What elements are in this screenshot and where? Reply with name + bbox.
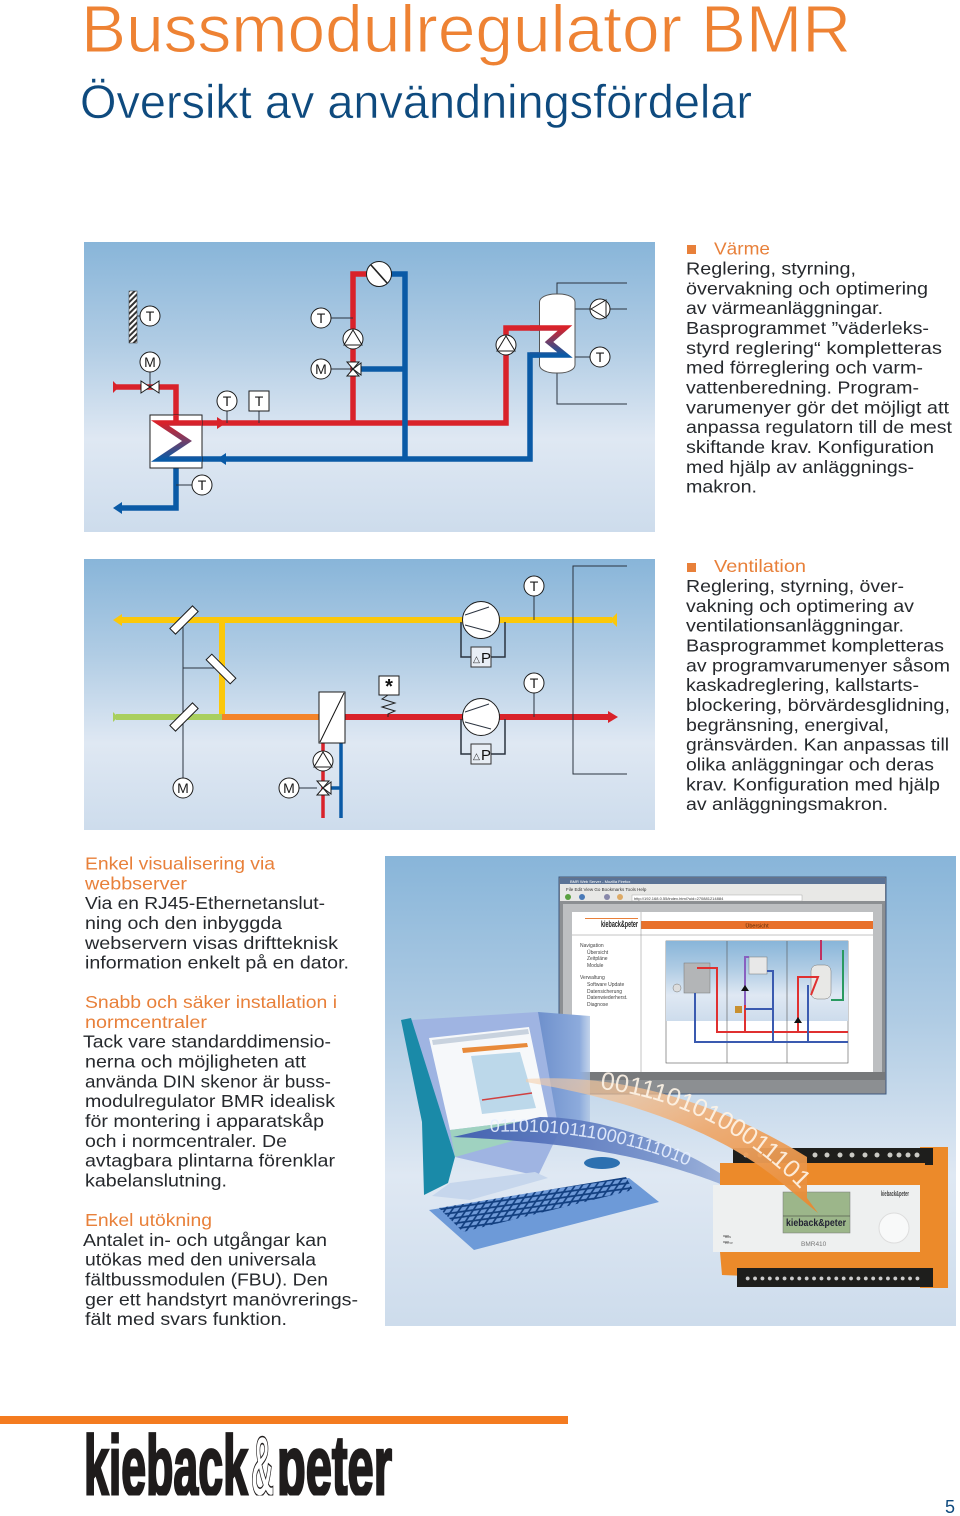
blue pipes — [118, 274, 560, 508]
text block: Enkel utökning — [83, 1210, 358, 1329]
icon: hot water tank — [496, 283, 627, 404]
text block: Ventilation: begränsning, energival, — [686, 715, 889, 735]
icon: hot water tank: T — [596, 349, 605, 365]
orange data ribbon — [526, 1072, 818, 1213]
panel: ventilation diagram — [84, 559, 655, 830]
icon: exhaust fan with pressure switch — [461, 602, 505, 667]
blue data ribbon — [453, 1117, 720, 1184]
text block: Enkel utökning: Enkel utökning — [85, 1210, 212, 1230]
browser window: Navigation — [580, 943, 604, 949]
text block: Snabb och säker installation: Snabb och säker installation i — [85, 992, 337, 1012]
orange data ribbon: 00111010100011101 — [602, 1072, 809, 1188]
keyboard — [429, 1177, 659, 1250]
text block: Enkel visualisering via webbserver: Enkel visualisering via — [85, 854, 275, 874]
icon: frost guard — [379, 676, 399, 717]
icon: T sensors on main — [176, 391, 269, 495]
icon: supply fan with pressure switch: P — [481, 747, 491, 764]
icon: T sensors: T — [530, 578, 539, 594]
text block: Enkel utökning: ger ett handstyrt manövrerings- — [85, 1289, 358, 1309]
red pipes — [113, 274, 560, 423]
browser window: Zeitpläne — [587, 956, 608, 962]
text block: Värme: Basprogrammet ”väderleks- — [686, 318, 929, 338]
icon: motor valve: M — [144, 354, 156, 370]
text block: Snabb och säker installation: modulregulator BMR idealisk — [85, 1091, 335, 1111]
text block: Snabb och säker installation: för montering i apparatskåp — [85, 1111, 324, 1131]
text block: Värme: styrd reglering“ kompletteras — [686, 338, 942, 358]
icon: outdoor wall sensor — [129, 291, 160, 343]
text block: Snabb och säker installation — [83, 992, 337, 1190]
browser window: Verwaltung — [580, 975, 605, 981]
text block: Ventilation: gränsvärden. Kan anpassas till — [686, 735, 949, 755]
mouse — [584, 1157, 620, 1169]
text block: Ventilation: Ventilation — [714, 556, 806, 576]
icon: T sensors: T — [530, 675, 539, 691]
icon: frost guard: * — [385, 676, 393, 698]
text block: Snabb och säker installation: och i normcentraler. De — [85, 1131, 287, 1151]
text block: Snabb och säker installation: nerna och möjligheten att — [85, 1052, 306, 1072]
text block: Enkel visualisering via webbserver: webbserver — [84, 873, 187, 893]
text block: Värme: övervakning och optimering — [686, 278, 928, 298]
icon: duct arrow heads — [113, 613, 618, 723]
panel: heating diagram — [84, 242, 655, 532]
browser window — [559, 877, 886, 1094]
text block: Ventilation: Basprogrammet kompletteras — [686, 636, 944, 656]
text block: Värme: anpassa regulatorn till de mest — [686, 417, 952, 437]
text block: Ventilation: olika anläggningar och deras — [686, 754, 934, 774]
icon: T sensors on main: T — [223, 393, 232, 409]
text block: Snabb och säker installation: normcentraler — [85, 1012, 207, 1032]
text block: Värme: varumenyer gör det möjligt att — [686, 397, 949, 417]
logo: kieback&peter: peter — [277, 1419, 392, 1513]
text block: Enkel visualisering via webbserver: ning och den inbyggda — [85, 913, 282, 933]
text block: Enkel utökning: utökas med den universala — [85, 1250, 316, 1270]
text block: Enkel visualisering via webbserver — [84, 854, 349, 973]
icon: inlet and outlet arrow heads — [113, 381, 226, 514]
text block: Enkel visualisering via webbserver: webservern visas driftteknisk — [84, 933, 338, 953]
icon: radiator circuit controls — [311, 262, 392, 379]
browser window: Module — [587, 963, 604, 969]
browser window: Datensicherung — [587, 989, 622, 995]
browser window: Software Update — [587, 982, 624, 988]
browser window: http://192.168.0.55/index.html?uid=270881214884 — [634, 896, 724, 901]
browser window: BMR Web Server - Mozilla Firefox — [570, 879, 630, 884]
text block: Värme: med hjälp av anläggnings- — [686, 457, 914, 477]
browser window: Übersicht — [745, 922, 769, 930]
panel: system illustration — [385, 856, 956, 1326]
text block: Värme: av värmeanläggningar. — [686, 298, 883, 318]
icon: dampers and motor — [170, 606, 236, 798]
text block: Ventilation: av programvarumenyer såsom — [686, 655, 950, 675]
BMR410 controller: BMR410 — [801, 1241, 827, 1248]
text block: Enkel utökning: fältbussmodulen (FBU). Den — [85, 1270, 328, 1290]
text block: Snabb och säker installation: avtagbara plintarna förenklar — [85, 1151, 335, 1171]
text block: Snabb och säker installation: Tack vare standarddimensio- — [83, 1032, 331, 1052]
computer tower — [538, 1012, 590, 1130]
logo: kieback&peter: & — [251, 1419, 274, 1513]
browser window: Übersicht — [587, 949, 609, 956]
icon: exhaust fan with pressure switch: △ — [473, 654, 480, 664]
text block: Enkel utökning: Antalet in- och utgångar kan — [83, 1230, 327, 1250]
icon: heating coil and water circuit — [279, 692, 345, 818]
text block: Snabb och säker installation: använda DIN skenor är buss- — [85, 1071, 331, 1091]
supply air duct — [116, 714, 610, 720]
BMR410 controller: Bus — [725, 1235, 731, 1239]
browser window: Diagnose — [587, 1002, 608, 1008]
text block: Ventilation: av anläggningsmakron. — [686, 794, 888, 814]
orange footer bar — [0, 1416, 568, 1424]
yellow ducts — [118, 620, 612, 717]
logo: kieback&peter — [86, 1432, 392, 1496]
icon: motor valve — [140, 352, 160, 393]
BMR410 controller: kieback&peter — [786, 1218, 846, 1229]
text block: Enkel visualisering via webbserver: information enkelt på en dator. — [85, 953, 349, 973]
icon: radiator circuit controls: T — [317, 310, 326, 326]
blue data ribbon: 011010101110001111010 — [490, 1119, 690, 1164]
subtitle: Översikt av användningsfördelar — [80, 75, 752, 128]
BMR410 controller: ●●●●●●●●●●●●●●●●●●●●●●●● — [745, 1273, 920, 1283]
icon: supply fan with pressure switch: △ — [473, 751, 480, 761]
text block: Ventilation: kaskadreglering, kallstarts- — [686, 675, 919, 695]
BMR410 controller: Error — [725, 1241, 734, 1245]
icon: exhaust fan with pressure switch: P — [481, 650, 491, 667]
text block: Enkel visualisering via webbserver: Via en RJ45-Ethernetanslut- — [85, 893, 325, 913]
text block: Värme: Reglering, styrning, — [686, 258, 856, 278]
text block: Ventilation: Reglering, styrning, över- — [686, 576, 904, 596]
browser plant schematic — [666, 940, 848, 1063]
text block: Värme: med förreglering och varm- — [686, 358, 923, 378]
icon: T sensors — [524, 576, 544, 717]
icon: outdoor wall sensor: T — [146, 308, 155, 324]
text block: Ventilation: ventilationsanläggningar. — [686, 616, 904, 636]
logo: kieback&peter: kieback — [84, 1419, 248, 1513]
browser window: File Edit View Go Bookmarks Tools Help — [566, 887, 647, 892]
text block: Värme: makron. — [686, 477, 757, 497]
text block: Ventilation: vakning och optimering av — [686, 596, 914, 616]
text block: Ventilation: krav. Konfiguration med hjälp — [686, 774, 940, 794]
icon: T sensors on main: T — [198, 477, 207, 493]
icon: heat exchanger — [150, 415, 202, 468]
browser window: Datenwiederherst. — [587, 995, 628, 1001]
text block: Ventilation — [686, 556, 950, 814]
text block: Värme: vattenberedning. Program- — [686, 378, 919, 398]
text block: Enkel utökning: fält med svars funktion. — [85, 1309, 287, 1329]
text block: Värme: Värme — [714, 238, 770, 258]
text block: Snabb och säker installation: kabelanslutning. — [85, 1170, 227, 1190]
text block: Ventilation: blockering, börvärdesglidning, — [686, 695, 950, 715]
BMR410 controller: kieback&peter — [881, 1191, 909, 1198]
monitor — [401, 1012, 559, 1200]
BMR410 controller — [713, 1147, 948, 1288]
text block: Värme: skiftande krav. Konfiguration — [686, 437, 934, 457]
icon: dampers and motor: M — [177, 780, 189, 796]
icon: T sensors on main: T — [255, 393, 264, 409]
icon: radiator circuit controls: M — [315, 361, 327, 377]
browser window: kieback&peter — [601, 919, 638, 929]
icon: supply fan with pressure switch — [461, 698, 505, 764]
text block: Värme — [686, 238, 952, 497]
icon: heating coil and water circuit: M — [283, 780, 295, 796]
